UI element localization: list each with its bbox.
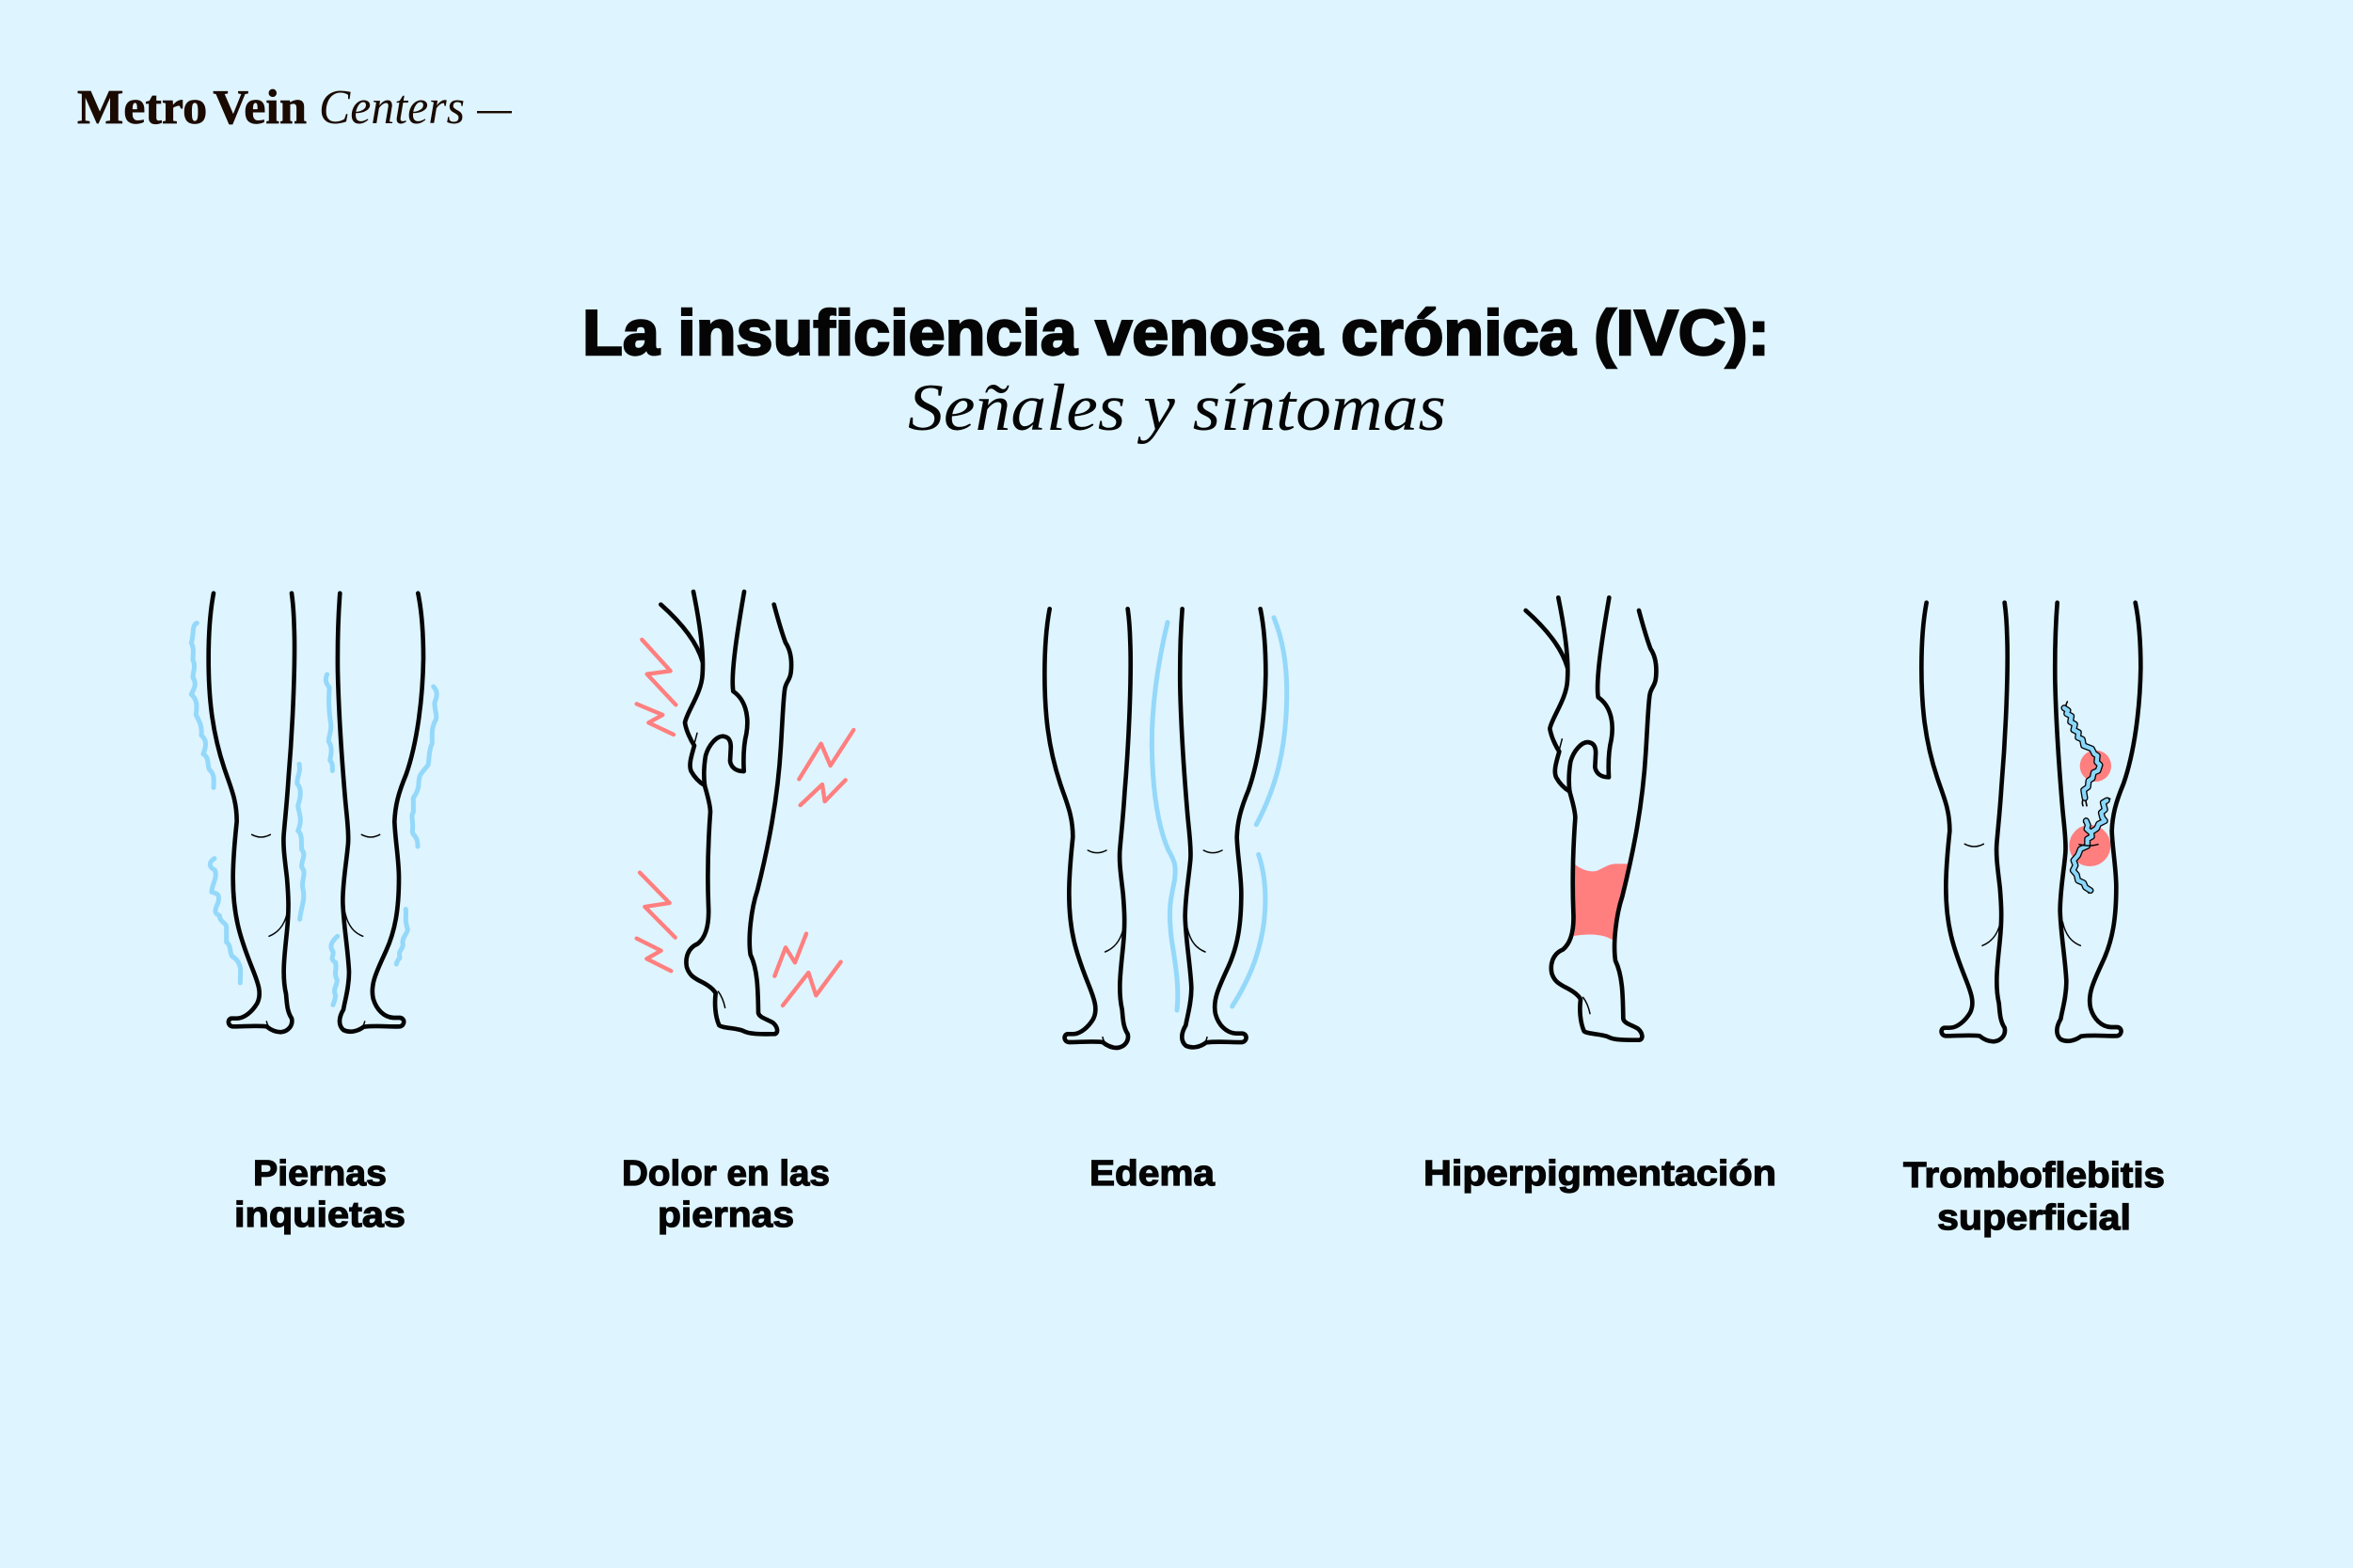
label: Piernas inquietas: Piernas <box>253 1154 387 1194</box>
title: La insuficiencia venosa crónica (IVC): <box>582 297 1770 369</box>
logo: Metro Vein Centers: Metro Vein <box>77 81 307 135</box>
label: Tromboflebitis superficial: superficial <box>1937 1198 2131 1238</box>
panel: dolor en las piernas <box>622 592 853 1235</box>
subtitle: Señales y síntomas <box>908 372 1446 445</box>
panel: piernas inquietas <box>191 594 437 1235</box>
label: Hiperpigmentación: Hiperpigmentación <box>1423 1154 1776 1194</box>
panel: hiperpigmentación <box>1423 597 1776 1194</box>
logo: Metro Vein Centers: Centers <box>319 81 465 135</box>
panel: edema <box>1044 609 1287 1194</box>
label: Tromboflebitis superficial: Tromboflebitis <box>1903 1156 2165 1196</box>
illustration: legs with swelling outline <box>1044 609 1287 1048</box>
label: Dolor en las piernas <box>622 1154 830 1235</box>
label: Dolor en las piernas: Dolor en las <box>622 1154 830 1194</box>
label: Edema: Edema <box>1089 1154 1216 1194</box>
label: Dolor en las piernas: piernas <box>658 1196 794 1235</box>
illustration: side leg with pain bolts <box>637 592 853 1034</box>
illustration: side leg with red pigmented band <box>1526 597 1656 1040</box>
label: Tromboflebitis superficial <box>1903 1156 2165 1238</box>
illustration: restless legs with blue squiggles <box>191 594 437 1032</box>
logo: Metro Vein Centers <box>77 81 512 135</box>
label: Piernas inquietas <box>234 1154 405 1235</box>
illustration: legs with inflamed veins <box>1921 603 2140 1041</box>
label: Piernas inquietas: inquietas <box>234 1196 405 1235</box>
panel: tromboflebitis superficial <box>1903 603 2165 1238</box>
